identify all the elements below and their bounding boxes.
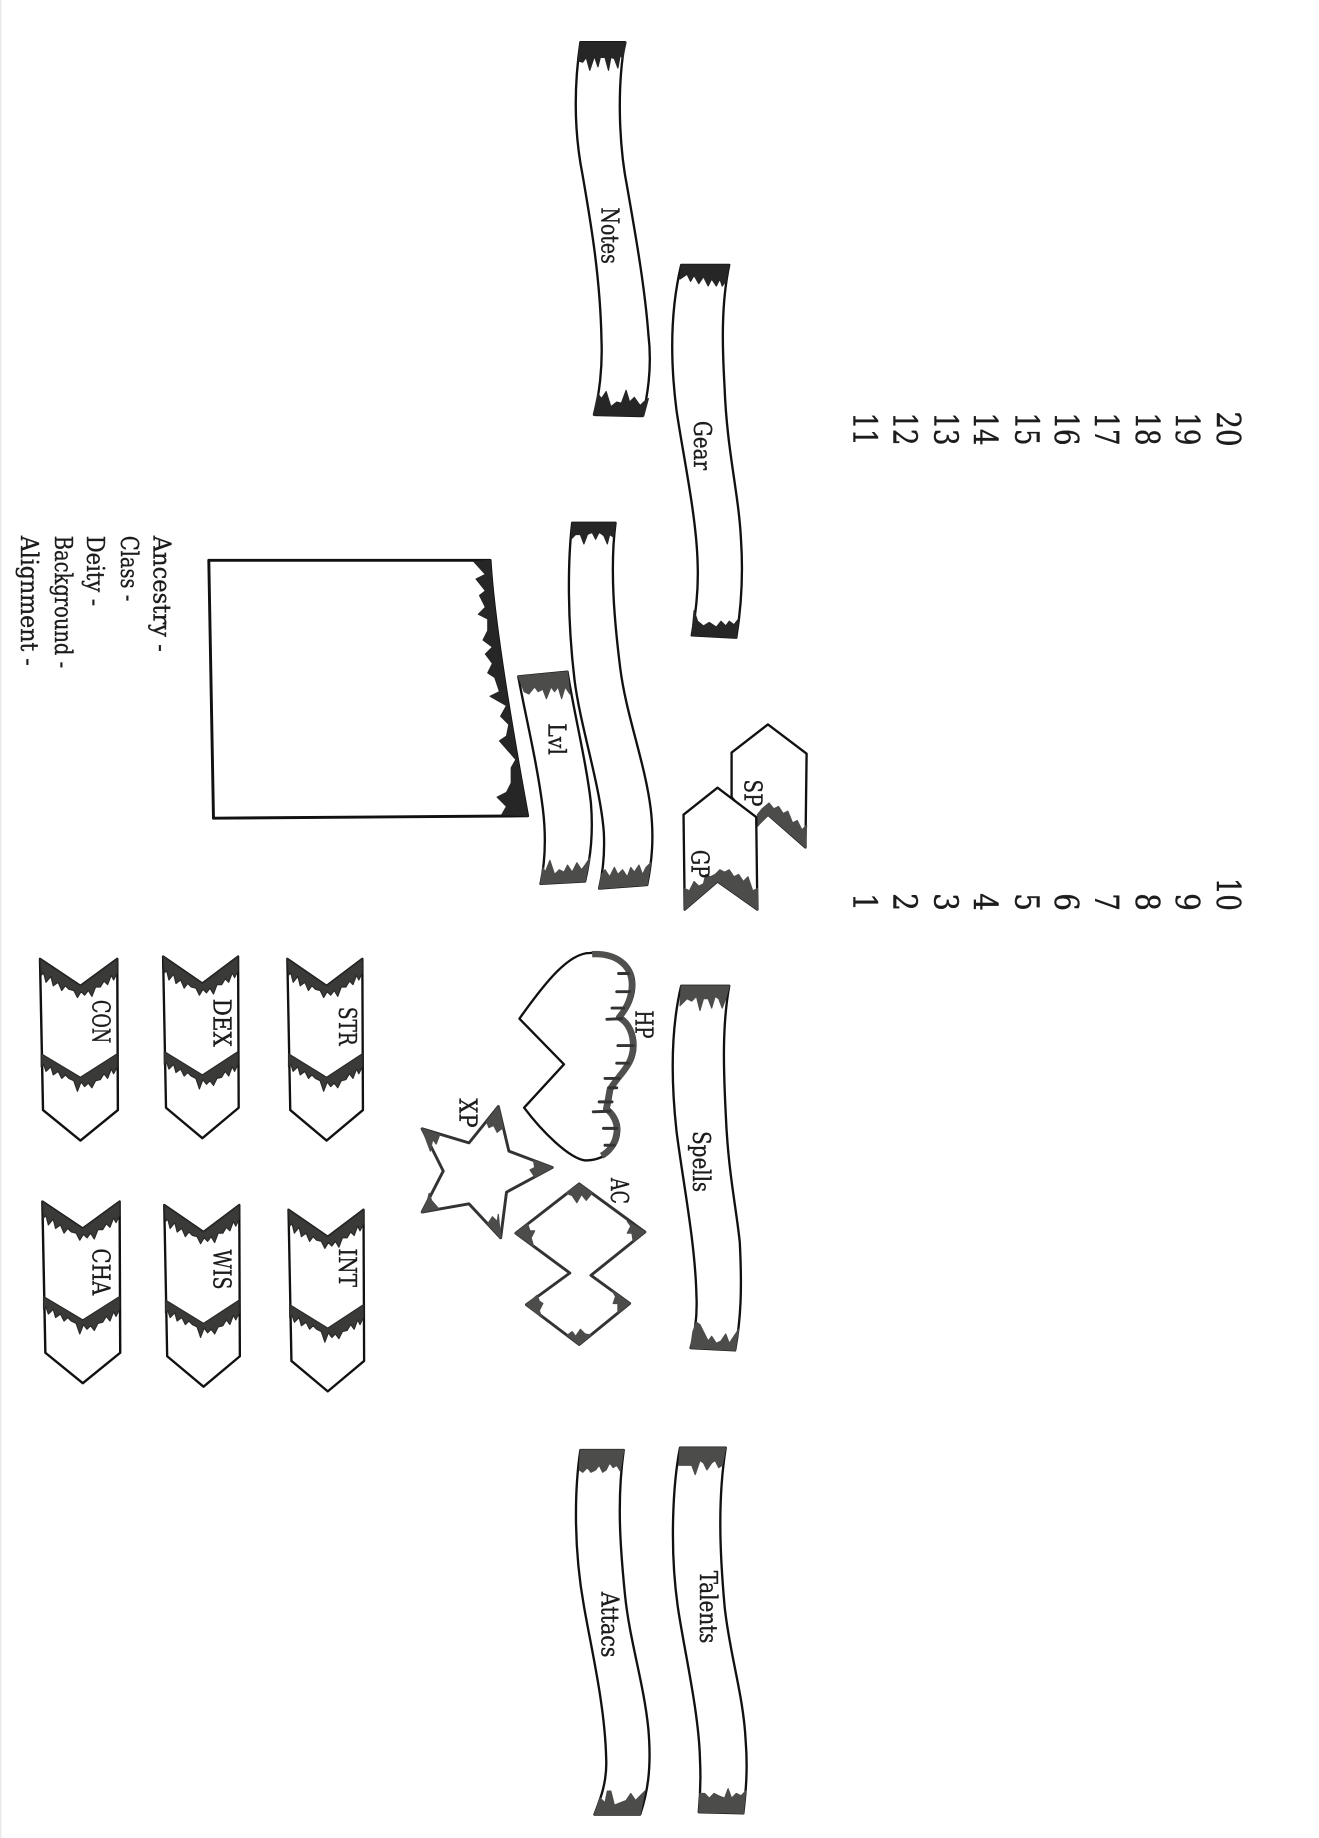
portrait box <box>209 560 528 818</box>
level numbers 11 to 20: 13 <box>926 413 964 445</box>
level numbers 11 to 20: 11 <box>845 413 883 445</box>
label: AC: AC <box>605 1177 634 1204</box>
level numbers 11 to 20: 17 <box>1087 413 1125 445</box>
label: Lvl: Lvl <box>543 723 572 755</box>
level numbers 1 to 10: 10 <box>1209 878 1247 911</box>
label: GP: GP <box>686 850 715 878</box>
level numbers 11 to 20: 19 <box>1168 413 1206 445</box>
stat: CHA <box>42 1201 120 1383</box>
banner: Attacs <box>576 1450 650 1815</box>
level numbers 11 to 20: 12 <box>885 413 923 445</box>
level numbers 1 to 10: 8 <box>1128 893 1166 911</box>
level numbers 11 to 20: 15 <box>1007 413 1045 445</box>
label: Attacs: Attacs <box>595 1591 624 1657</box>
banner: blank name ribbon <box>569 523 652 889</box>
label: HP: HP <box>629 1010 658 1039</box>
label: Notes: Notes <box>595 207 624 264</box>
level numbers 1 to 10: 2 <box>885 893 923 911</box>
label: Gear: Gear <box>688 421 717 470</box>
level numbers 11 to 20: 20 <box>1209 411 1247 447</box>
banner: Notes <box>576 42 650 416</box>
label: STR: STR <box>333 1007 362 1047</box>
banner: Spells <box>673 986 741 1350</box>
level numbers 11 to 20: 16 <box>1047 413 1085 445</box>
stat: CON <box>40 959 118 1141</box>
label: Spells: Spells <box>687 1131 716 1192</box>
character details text: Background - <box>49 536 78 668</box>
character details text: Alignment - <box>15 535 44 666</box>
banner: Talents <box>673 1448 747 1813</box>
level numbers 11 to 20 <box>845 411 1247 447</box>
character details text <box>15 535 177 668</box>
character details text: Deity - <box>81 536 110 606</box>
character details text: Class - <box>115 536 144 601</box>
shield: SP <box>732 724 807 847</box>
banner: Gear <box>672 265 742 638</box>
level numbers 1 to 10: 4 <box>966 893 1004 911</box>
label: WIS: WIS <box>207 1250 236 1289</box>
label: Talents: Talents <box>694 1571 723 1643</box>
stat: INT <box>289 1210 364 1391</box>
level numbers 1 to 10: 3 <box>926 893 964 911</box>
level numbers 11 to 20: 18 <box>1128 413 1166 445</box>
star: XP <box>422 1098 552 1238</box>
level numbers 1 to 10: 5 <box>1007 893 1045 911</box>
level numbers 1 to 10 <box>845 878 1247 911</box>
label: SP: SP <box>738 780 767 807</box>
level numbers 11 to 20: 14 <box>966 413 1004 445</box>
stat: WIS <box>164 1205 240 1387</box>
stat: STR <box>287 959 363 1141</box>
stat: DEX <box>163 957 239 1138</box>
label: INT: INT <box>333 1248 362 1287</box>
level numbers 1 to 10: 9 <box>1168 893 1206 911</box>
character details text: Ancestry - <box>148 535 177 652</box>
label: DEX: DEX <box>207 999 236 1047</box>
double diamond: AC <box>516 1177 645 1345</box>
heart: HP <box>519 953 658 1160</box>
label: XP: XP <box>454 1098 483 1128</box>
level numbers 1 to 10: 7 <box>1087 893 1125 911</box>
label: CON: CON <box>87 1000 116 1043</box>
level numbers 1 to 10: 1 <box>845 893 883 911</box>
label: CHA: CHA <box>87 1248 116 1296</box>
shield: GP <box>684 788 757 910</box>
level numbers 1 to 10: 6 <box>1047 893 1085 911</box>
banner: Lvl <box>518 672 592 884</box>
